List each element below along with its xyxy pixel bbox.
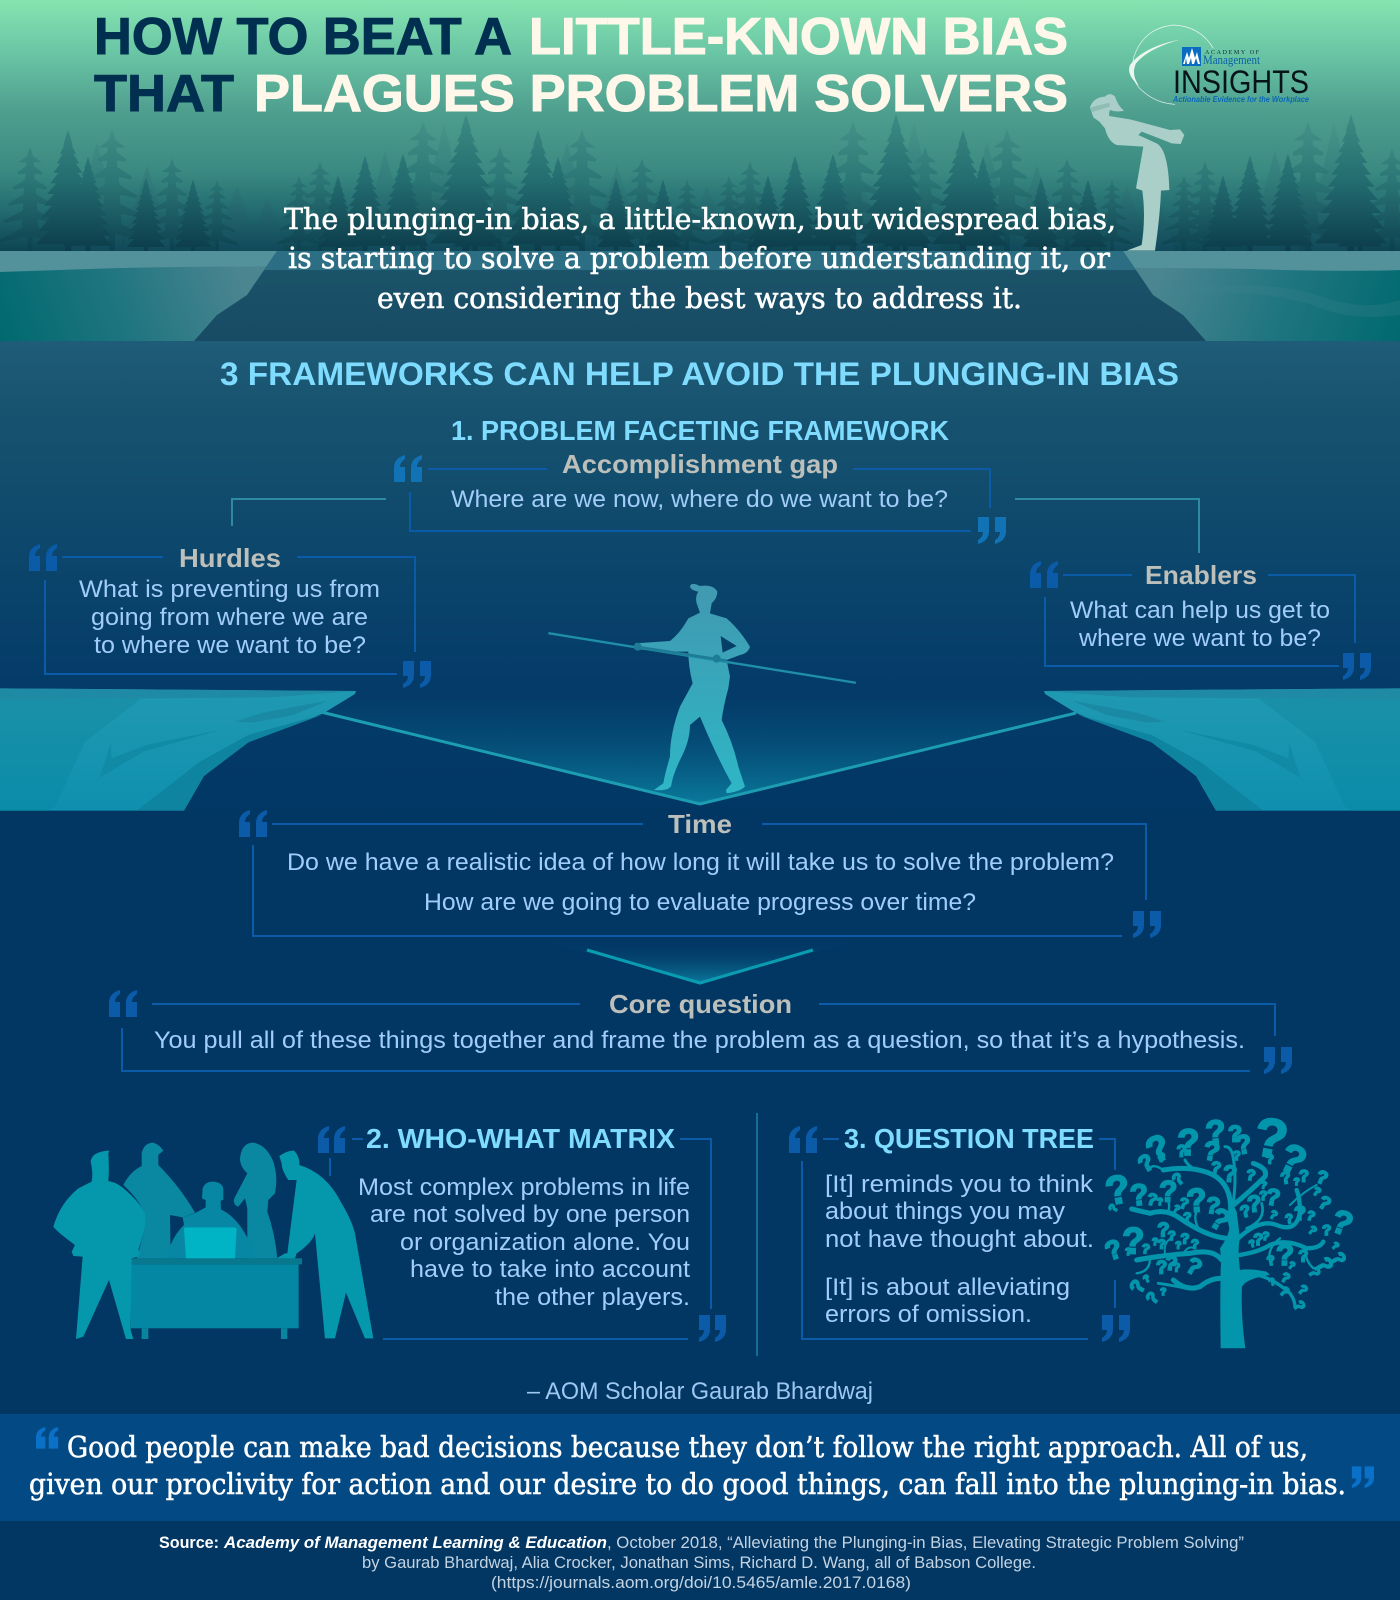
panel: pull quote band xyxy=(0,1414,1400,1521)
illustration: question mark tree: ? xyxy=(1245,1166,1257,1185)
illustration: question mark tree: ? xyxy=(1259,1188,1267,1203)
illustration: question mark tree: ? xyxy=(1201,1135,1222,1167)
illustration: question mark tree: ? xyxy=(1266,1252,1276,1269)
illustration: question mark tree: ? xyxy=(1248,1238,1257,1251)
illustration: question mark tree: ? xyxy=(1125,1247,1131,1258)
attribution: – AOM Scholar Gaurab Bhardwaj xyxy=(527,1378,873,1405)
illustration: question mark tree: ? xyxy=(1145,1189,1159,1210)
illustration: question mark tree: ? xyxy=(1140,1241,1151,1257)
illustration: question mark tree: ? xyxy=(1294,1203,1306,1225)
panel: who-what matrix: Most complex problems in life xyxy=(358,1174,690,1201)
connector: accomplishment gap to enablers xyxy=(1015,499,1199,553)
panel: hurdles: going from where we are xyxy=(91,604,368,631)
illustration: question mark tree: ? xyxy=(1272,1135,1313,1185)
illustration: question mark tree: ? xyxy=(1156,1256,1167,1277)
illustration: question mark tree: ? xyxy=(1286,1260,1297,1272)
panel: question tree: 3. QUESTION TREE xyxy=(844,1123,1094,1154)
section heading: 3 FRAMEWORKS CAN HELP AVOID THE PLUNGING-IN BIAS xyxy=(220,356,1179,392)
illustration: question mark tree: ? xyxy=(1327,1248,1351,1269)
illustration: right cliff xyxy=(1044,688,1400,811)
illustration: question mark tree: ? xyxy=(1222,1160,1238,1187)
illustration: question mark tree: ? xyxy=(1139,1125,1177,1172)
illustration: question mark tree: ? xyxy=(1278,1269,1293,1286)
panel: time: Time xyxy=(668,809,732,839)
illustration: question mark tree: ? xyxy=(1126,1276,1151,1298)
illustration: question mark tree: ? xyxy=(1204,1191,1222,1219)
connector: accomplishment gap to hurdles xyxy=(232,499,386,526)
panel: question tree: errors of omission. xyxy=(825,1301,1032,1328)
forest silhouette xyxy=(4,115,1400,251)
panel: hurdles: Hurdles xyxy=(179,543,281,573)
illustration: question mark tree: ? xyxy=(1305,1223,1319,1238)
illustration: question mark tree: ? xyxy=(1180,1230,1190,1247)
source citation: by Gaurab Bhardwaj, Alia Crocker, Jonathan Sims, Richard D. Wang, all of Babson College. xyxy=(362,1554,1036,1572)
illustration: question mark tree: ? xyxy=(1185,1182,1208,1221)
illustration: question mark tree: ? xyxy=(1163,1252,1179,1276)
illustration: question mark tree: ? xyxy=(1313,1165,1331,1189)
illustration: question mark tree: ? xyxy=(1264,1183,1282,1211)
source citation: Source: xyxy=(159,1534,219,1552)
illustration: question mark tree: ? xyxy=(1101,1233,1126,1267)
illustration: question mark tree: ? xyxy=(1204,1114,1227,1152)
intro text: is starting to solve a problem before understanding it, or xyxy=(288,241,1110,275)
panel: enablers xyxy=(1030,560,1371,680)
illustration: question mark tree: ? xyxy=(1173,1262,1180,1275)
panel: who-what matrix: 2. WHO-WHAT MATRIX xyxy=(366,1123,675,1154)
intro text: The plunging-in bias, a little-known, but widespread bias, xyxy=(284,202,1116,236)
illustration: question mark tree: ? xyxy=(1158,1236,1166,1251)
panel: question tree: about things you may xyxy=(825,1198,1065,1225)
illustration: question mark tree: ? xyxy=(1329,1240,1341,1253)
tightrope with glow xyxy=(280,700,1120,804)
illustration: question mark tree: ? xyxy=(1233,1148,1241,1163)
logo: Academy of Management Insights: Management xyxy=(1203,52,1260,67)
illustration: question mark tree: ? xyxy=(1157,1197,1163,1208)
panel: enablers: Enablers xyxy=(1145,560,1257,590)
illustration: question mark tree: ? xyxy=(1311,1253,1339,1277)
illustration: question mark tree: ? xyxy=(1129,1178,1150,1213)
illustration: question mark tree: ? xyxy=(1266,1151,1274,1166)
illustration: question mark tree: ? xyxy=(1322,1222,1331,1239)
source citation: (https://journals.aom.org/doi/10.5465/amle.2017.0168) xyxy=(491,1574,911,1592)
illustration: question mark tree: ? xyxy=(1142,1288,1163,1308)
illustration: people around a desk xyxy=(53,1143,373,1339)
illustration: question mark tree: ? xyxy=(1304,1207,1317,1224)
panel: accomplishment gap: Where are we now, where do we want to be? xyxy=(451,486,948,513)
illustration: question mark tree: ? xyxy=(1175,1240,1181,1251)
arrow: chevron to core question xyxy=(540,940,860,983)
illustration: question mark tree: ? xyxy=(1102,1167,1134,1214)
panel: question tree xyxy=(789,1123,1130,1342)
logo: Academy of Management Insights: INSIGHTS xyxy=(1173,64,1309,100)
figure: woman leaning at water's edge xyxy=(1090,94,1184,251)
illustration: question mark tree: ? xyxy=(1253,1230,1263,1249)
illustration: question mark tree: ? xyxy=(1160,1287,1166,1298)
illustration: question mark tree: ? xyxy=(1315,1191,1335,1215)
illustration: question mark tree: ? xyxy=(1289,1298,1309,1314)
illustration: question mark tree: ? xyxy=(1106,1202,1121,1215)
illustration: question mark tree: ? xyxy=(1159,1176,1177,1209)
panel: hurdles: to where we want to be? xyxy=(94,632,366,659)
panel: who-what matrix: are not solved by one person xyxy=(370,1201,690,1228)
illustration: question mark tree: ? xyxy=(1122,1220,1145,1261)
illustration: question mark tree: ? xyxy=(1277,1283,1292,1300)
title: PLAGUES PROBLEM SOLVERS xyxy=(254,65,1068,123)
panel: enablers: What can help us get to xyxy=(1070,597,1330,624)
illustration: question mark tree xyxy=(1101,1105,1358,1348)
illustration: question mark tree: ? xyxy=(1142,1273,1152,1286)
illustration: question mark tree: ? xyxy=(1177,1195,1190,1213)
illustration: question mark tree: ? xyxy=(1171,1203,1182,1216)
intro text xyxy=(284,202,1116,315)
panel: hurdles xyxy=(29,543,431,688)
source citation xyxy=(159,1534,1244,1592)
illustration: question mark tree: ? xyxy=(1284,1211,1295,1227)
logo: Academy of Management Insights: ACADEMY OF xyxy=(1205,50,1260,56)
panel: time: Do we have a realistic idea of how long it will take us to solve the problem? xyxy=(287,849,1114,876)
illustration: question mark tree: ? xyxy=(1191,1236,1199,1251)
illustration: question mark tree: ? xyxy=(1268,1276,1277,1289)
illustration: question mark tree: ? xyxy=(1238,1201,1253,1222)
panel: core question: Core question xyxy=(609,989,792,1019)
illustration: question mark tree: ? xyxy=(1233,1128,1254,1161)
title: THAT xyxy=(94,65,234,123)
title xyxy=(94,8,1068,123)
panel: question tree: [It] reminds you to think xyxy=(825,1171,1094,1198)
logo: Academy of Management Insights xyxy=(1129,25,1310,104)
illustration: question mark tree: ? xyxy=(1295,1282,1311,1298)
panel: core question: You pull all of these things together and frame the problem as a question, so that it’s a hypothesis. xyxy=(154,1027,1245,1054)
illustration: question mark tree: ? xyxy=(1228,1121,1242,1147)
panel: pull quote band: Good people can make bad decisions because they don’t follow the right approach. All of us, xyxy=(67,1430,1308,1464)
illustration: question mark tree: ? xyxy=(1158,1152,1165,1165)
illustration: question mark tree: ? xyxy=(1183,1210,1191,1225)
panel: who-what matrix: the other players. xyxy=(495,1284,690,1311)
illustration: question mark tree: ? xyxy=(1298,1247,1308,1266)
illustration: question mark tree: ? xyxy=(1261,1230,1270,1244)
panel: question tree: [It] is about alleviating xyxy=(825,1274,1070,1301)
illustration: question mark tree: ? xyxy=(1168,1169,1188,1190)
logo: Academy of Management Insights: Actionable Evidence for the Workplace xyxy=(1172,95,1310,104)
illustration: question mark tree: ? xyxy=(1157,1220,1169,1242)
illustration: question mark tree: ? xyxy=(1168,1228,1176,1243)
illustration: question mark tree: ? xyxy=(1246,1190,1263,1217)
panel: who-what matrix: or organization alone. You xyxy=(400,1229,690,1256)
panel: time xyxy=(239,809,1161,938)
illustration: question mark tree: ? xyxy=(1299,1167,1309,1186)
illustration: question mark tree: ? xyxy=(1276,1239,1294,1272)
panel: time: How are we going to evaluate progress over time? xyxy=(424,889,976,916)
panel: hurdles: What is preventing us from xyxy=(79,576,380,603)
illustration: question mark tree: ? xyxy=(1326,1203,1358,1244)
panel: core question xyxy=(109,989,1292,1074)
panel: accomplishment gap xyxy=(394,449,1006,544)
framework 1 heading: 1. PROBLEM FACETING FRAMEWORK xyxy=(451,415,949,446)
water and central ledge xyxy=(0,251,1400,341)
illustration: question mark tree: ? xyxy=(1294,1177,1300,1188)
illustration: question mark tree: ? xyxy=(1177,1122,1200,1163)
panel: accomplishment gap: Accomplishment gap xyxy=(562,449,838,479)
illustration: question mark tree: ? xyxy=(1249,1105,1293,1171)
panel: who-what matrix xyxy=(318,1123,726,1342)
illustration: question mark tree: ? xyxy=(1152,1237,1158,1248)
illustration: question mark tree: ? xyxy=(1310,1185,1323,1199)
source citation: Academy of Management Learning & Education xyxy=(223,1534,607,1552)
title: HOW TO BEAT A xyxy=(94,8,512,66)
source citation: , October 2018, “Alleviating the Plunging-in Bias, Elevating Strategic Problem Solving” xyxy=(607,1534,1244,1552)
illustration: left cliff xyxy=(0,688,356,811)
illustration: question mark tree: ? xyxy=(1181,1252,1207,1281)
panel: who-what matrix: have to take into account xyxy=(410,1256,690,1283)
illustration: question mark tree: ? xyxy=(1260,1180,1268,1192)
panel: enablers: where we want to be? xyxy=(1078,625,1321,652)
illustration: question mark tree: ? xyxy=(1204,1201,1236,1239)
illustration: question mark tree: ? xyxy=(1267,1208,1280,1223)
illustration: question mark tree: ? xyxy=(1177,1142,1187,1161)
divider xyxy=(756,1113,758,1356)
illustration: question mark tree: ? xyxy=(1133,1148,1159,1178)
illustration: question mark tree: ? xyxy=(1279,1168,1292,1188)
intro text: even considering the best ways to address it. xyxy=(377,281,1022,315)
illustration: question mark tree: ? xyxy=(1304,1265,1324,1281)
title: LITTLE-KNOWN BIAS xyxy=(529,8,1068,66)
illustration: tightrope walker with pole xyxy=(549,584,855,793)
illustration: question mark tree: ? xyxy=(1209,1158,1223,1178)
panel: question tree: not have thought about. xyxy=(825,1226,1094,1253)
